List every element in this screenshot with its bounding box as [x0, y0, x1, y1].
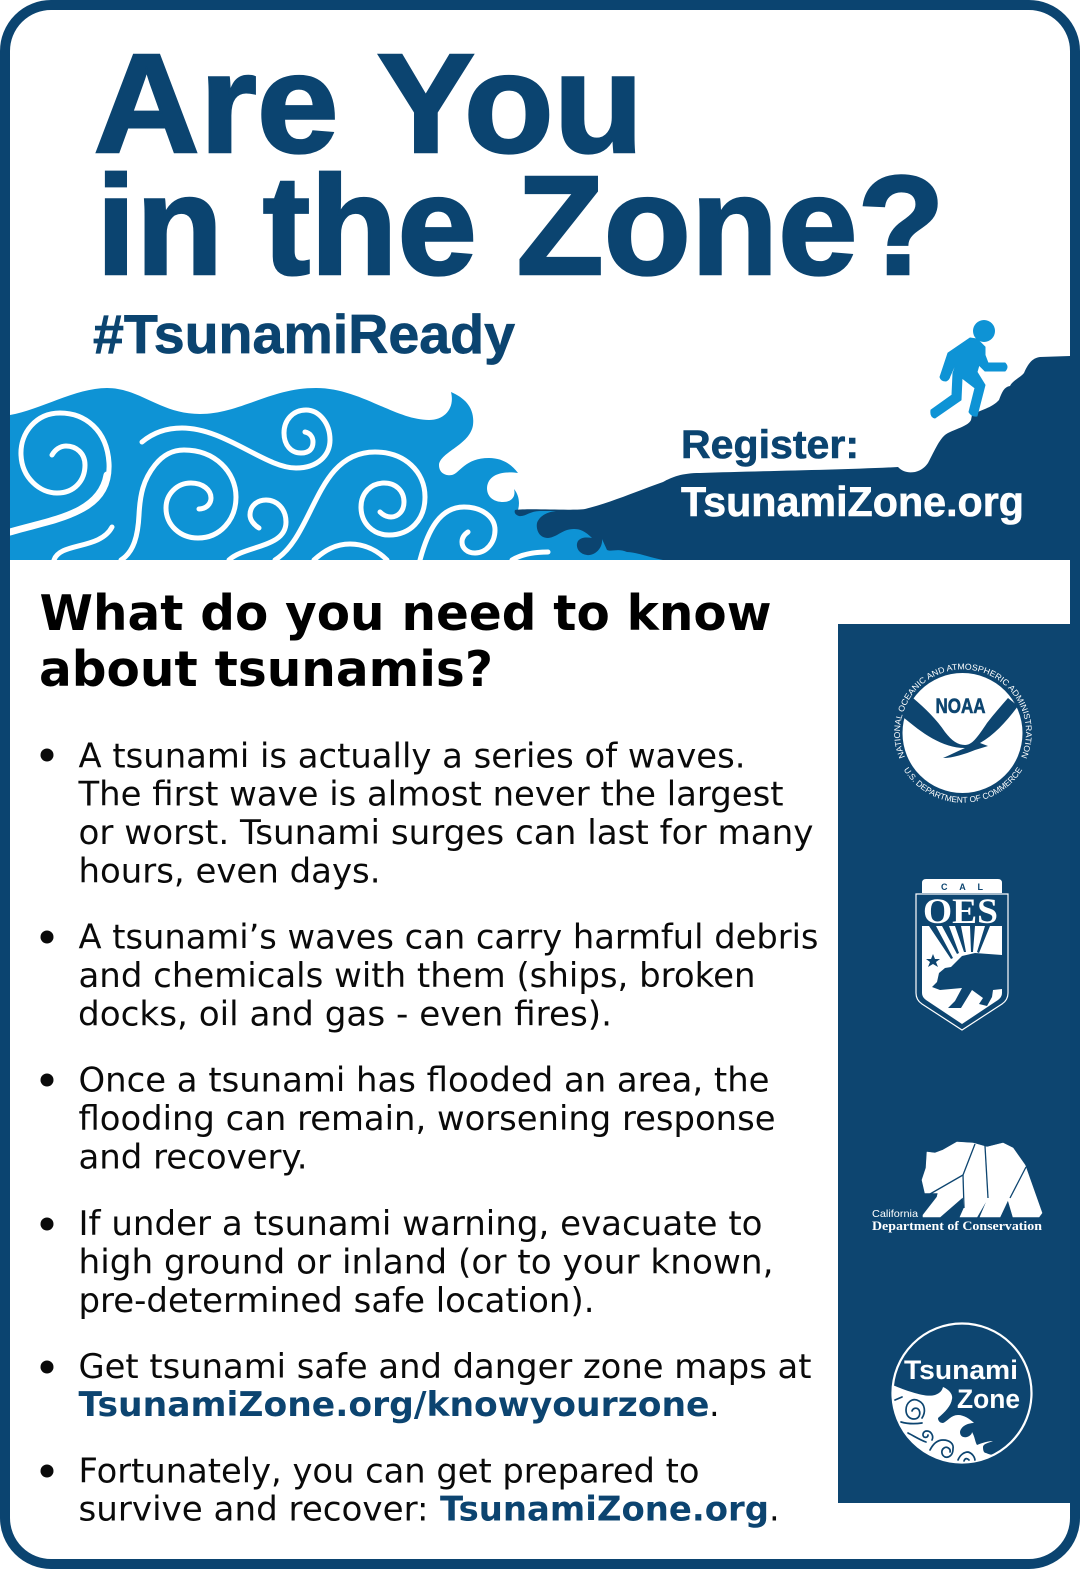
- bullet 1: A tsunami is actually a series of waves.: [78, 736, 746, 776]
- logo: Cal OES: OES: [923, 891, 998, 931]
- bullet 1: hours, even days.: [78, 852, 380, 890]
- bullet 2: docks, oil and gas - even fires).: [78, 994, 612, 1034]
- logo: Tsunami Zone: Zone: [957, 1384, 1020, 1414]
- bullet 1: [40, 736, 814, 890]
- bullet list: [40, 736, 818, 1528]
- title: [94, 24, 945, 304]
- bullet 2: and chemicals with them (ships, broken: [78, 956, 756, 995]
- logo: Cal OES: C A L: [941, 882, 984, 892]
- bullet 6: TsunamiZone.org: [440, 1490, 769, 1528]
- bullet 3: flooding can remain, worsening response: [78, 1099, 776, 1138]
- bullet 1: The first wave is almost never the largest: [77, 774, 783, 814]
- bullet 6: Fortunately, you can get prepared to: [78, 1452, 700, 1490]
- bullet 6: survive and recover:: [78, 1490, 428, 1528]
- title: in the Zone?: [96, 146, 945, 304]
- heading: What do you need to know: [40, 585, 772, 642]
- bullet 4: [40, 1204, 774, 1320]
- bullet 3: [40, 1060, 776, 1176]
- logo: Tsunami Zone: [880, 1324, 1032, 1470]
- register callout: Register:: [681, 423, 859, 467]
- banner illustration: wave and hillside: [10, 356, 1070, 560]
- white wave swirls: [10, 410, 548, 560]
- logo: NOAA: [894, 664, 1032, 803]
- bullet 3: and recovery.: [78, 1138, 308, 1176]
- bullet 5: [40, 1347, 812, 1424]
- logo: California Department of Conservation: Department of Conservation: [872, 1218, 1043, 1233]
- bullet 6: [40, 1452, 780, 1528]
- heading: about tsunamis?: [39, 641, 493, 698]
- panel: partner logos sidebar: [838, 624, 1070, 1503]
- bullet 4: high ground or inland (or to your known,: [78, 1242, 774, 1282]
- bullet 4: If under a tsunami warning, evacuate to: [78, 1204, 762, 1243]
- title: Are You: [94, 24, 644, 182]
- logo: Cal OES: [916, 879, 1008, 1030]
- heading: [39, 585, 772, 698]
- logo: NOAA: NATIONAL OCEANIC AND ATMOSPHERIC ADMINISTRATION: [894, 664, 1032, 758]
- bullet 5: .: [709, 1385, 720, 1424]
- hashtag: #TsunamiReady: [93, 303, 515, 365]
- website address: TsunamiZone.org: [681, 478, 1024, 525]
- bullet 4: pre-determined safe location).: [78, 1281, 594, 1320]
- icon: running person: [931, 320, 1007, 418]
- dark hillside: [515, 356, 1070, 560]
- bullet 1: or worst. Tsunami surges can last for many: [78, 813, 814, 852]
- bullet 2: [40, 918, 818, 1034]
- bullet 5: TsunamiZone.org/knowyourzone: [78, 1385, 710, 1424]
- bullet 5: Get tsunami safe and danger zone maps at: [78, 1347, 812, 1386]
- logo: NOAA: NOAA: [936, 695, 986, 718]
- bullet 6: .: [769, 1490, 780, 1528]
- logo: California Department of Conservation: [872, 1142, 1043, 1233]
- logo: California Department of Conservation: California: [872, 1208, 918, 1220]
- logo: NOAA: U.S. DEPARTMENT OF COMMERCE: [904, 766, 1022, 803]
- blue tsunami wave: [10, 388, 670, 560]
- bullet 2: A tsunami’s waves can carry harmful debris: [78, 918, 818, 956]
- logo: Tsunami Zone: Tsunami: [904, 1355, 1018, 1385]
- bullet 3: Once a tsunami has flooded an area, the: [78, 1060, 770, 1100]
